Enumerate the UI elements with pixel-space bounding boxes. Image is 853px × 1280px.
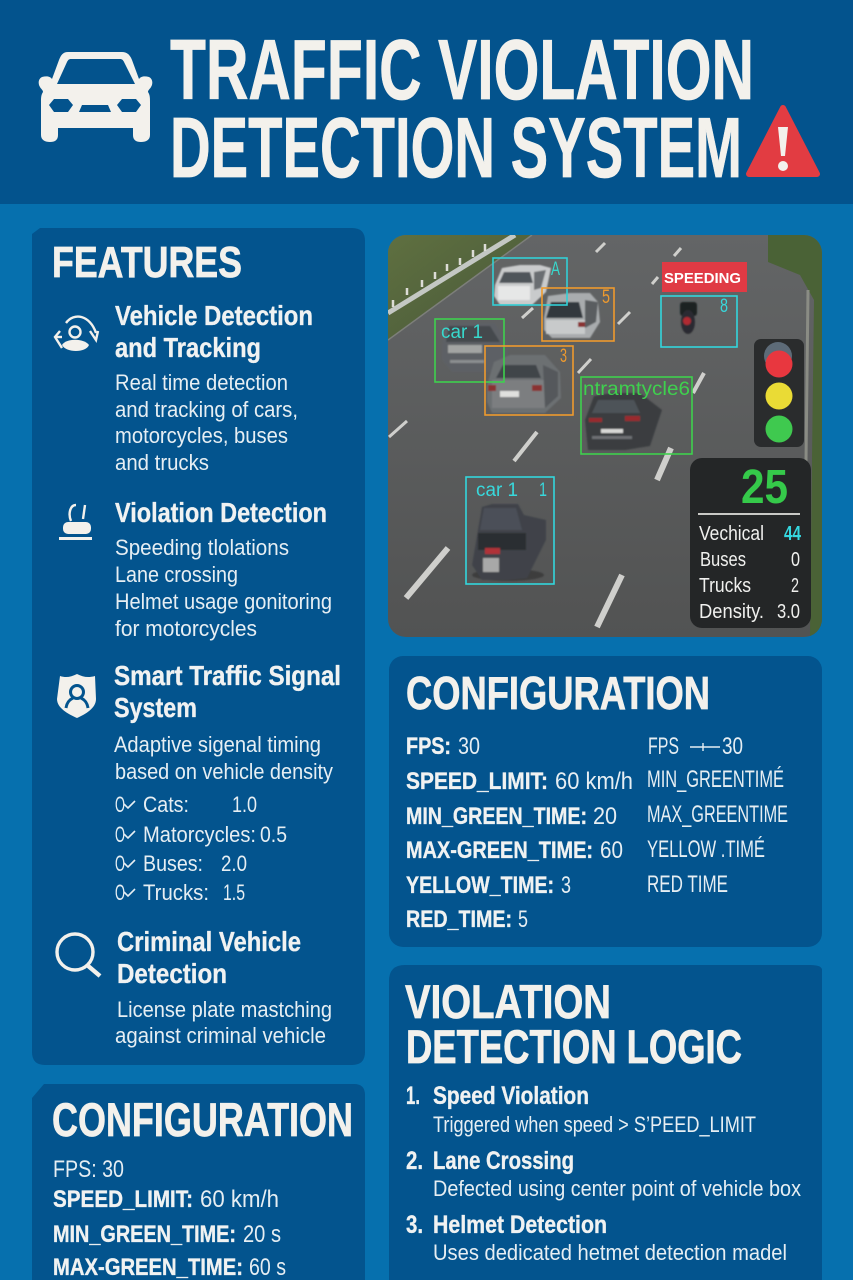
panel: configuration left [32, 1084, 365, 1280]
feature description: for motorcycles [115, 616, 257, 641]
configuration values: MIN_GREEN_TIME: [406, 803, 587, 830]
detection labels: 3 [560, 346, 567, 367]
vehicle weights list: 1.5 [223, 880, 245, 905]
vehicle weights list: O [115, 822, 125, 847]
configuration values: SPEED_LIMIT: [406, 768, 548, 795]
detection labels: ntramtycle6 [583, 379, 690, 400]
stats panel: 0 [791, 549, 800, 571]
vehicles [442, 265, 697, 581]
configuration second column: YELLOW .TIMÉ [647, 836, 765, 863]
detection boxes [435, 258, 737, 584]
configuration list: 60 km/h [200, 1186, 279, 1213]
configuration list: 20 s [243, 1221, 281, 1248]
logic item 2: Defected using center point of vehicle box [433, 1176, 801, 1201]
stats panel: Buses [700, 549, 746, 571]
configuration second column: MAX_GREENTIME [647, 801, 788, 828]
feature description [114, 732, 333, 784]
icon: violation [59, 505, 92, 540]
stats panel: 25 [741, 461, 788, 514]
configuration values: MAX-GREEN_TIME: [406, 837, 593, 864]
icon: warning triangle [749, 108, 817, 174]
photo: traffic detection scene [388, 235, 822, 637]
vehicle weights list: 2.0 [221, 851, 247, 876]
configuration values: 5 [518, 906, 528, 933]
detection labels: 5 [602, 287, 610, 308]
logic item 3: 3. [406, 1211, 423, 1239]
feature: criminal vehicle detection [57, 926, 332, 1048]
panel: features [32, 228, 365, 1065]
feature heading [115, 300, 313, 363]
panel: configuration right [389, 656, 822, 947]
stats panel: 44 [784, 523, 802, 545]
feature heading: Detection [117, 958, 227, 989]
feature description: and trucks [115, 450, 209, 475]
road surface [388, 235, 822, 637]
car: dark front [472, 504, 546, 581]
feature heading [114, 660, 341, 723]
configuration values: 60 km/h [555, 768, 633, 795]
stats panel [690, 458, 811, 628]
logic item 2: 2. [406, 1147, 423, 1175]
feature heading: and Tracking [115, 332, 261, 363]
stats panel: 2 [791, 575, 799, 597]
grass right [768, 235, 822, 637]
vehicle weights list [115, 792, 287, 905]
configuration second column: MIN_GREENTIMÉ [647, 766, 784, 793]
detection labels: A [551, 259, 560, 280]
vehicle weights list: Matorcycles: [143, 822, 256, 847]
feature description: against criminal vehicle [115, 1023, 326, 1048]
configuration values [406, 733, 633, 933]
feature description: based on vehicle density [115, 759, 333, 784]
configuration second column: FPS [648, 733, 679, 760]
car: silver [544, 293, 600, 338]
feature: vehicle detection and tracking [55, 300, 313, 475]
feature description [115, 535, 332, 641]
vehicle weights list: 0.5 [260, 822, 287, 847]
detection labels: 8 [720, 296, 728, 317]
heading: violation detection logic: VIOLATION [405, 975, 611, 1028]
car: gray left [446, 326, 500, 364]
logic item 1 [406, 1082, 756, 1137]
feature description: Speeding tlolations [115, 535, 289, 560]
configuration list: SPEED_LIMIT: [53, 1186, 193, 1213]
stats panel: Density. [699, 601, 764, 623]
car: gray centre [487, 355, 561, 413]
icon: shield [57, 674, 96, 718]
lane markings [389, 243, 704, 627]
configuration list [53, 1156, 286, 1280]
vehicle weights list: O [115, 792, 125, 817]
car: dark [585, 393, 662, 450]
configuration values: FPS: [406, 733, 451, 760]
feature description [115, 370, 298, 475]
logic item 1: Speed Violation [433, 1082, 589, 1110]
vehicle weights list: Buses: [143, 851, 203, 876]
logic item 3 [406, 1211, 787, 1265]
icon: car [39, 52, 152, 142]
detection labels [441, 259, 728, 501]
vehicle weights list: O [115, 880, 125, 905]
feature heading: System [114, 692, 197, 723]
heading: configuration: CONFIGURATION [52, 1093, 353, 1146]
feature description: and tracking of cars, [115, 397, 298, 422]
feature heading: Violation Detection [115, 497, 327, 528]
feature: smart traffic signal system [57, 660, 341, 905]
configuration list: MIN_GREEN_TIME: [53, 1221, 236, 1248]
grass left [388, 235, 532, 340]
icon: magnifier [57, 934, 100, 976]
configuration values: RED_TIME: [406, 906, 512, 933]
feature description: Helmet usage gonitoring [115, 589, 332, 614]
speeding tag [662, 262, 747, 292]
heading: violation detection logic [405, 975, 742, 1073]
configuration values: 3 [561, 872, 571, 899]
detection labels: car 1 [441, 322, 483, 343]
feature description: motorcycles, buses [115, 423, 288, 448]
stats panel: Trucks [699, 575, 751, 597]
speeding tag: SPEEDING [664, 270, 741, 287]
configuration values: YELLOW_TIME: [406, 872, 554, 899]
motorcycle [680, 302, 697, 334]
feature heading: Vehicle Detection [115, 300, 313, 331]
detection labels: 1 [539, 480, 547, 501]
feature description: License plate mastching [117, 997, 332, 1022]
feature heading: Smart Traffic Signal [114, 660, 341, 691]
logic item 1: Triggered when speed > S’PEED_LIMIT [433, 1112, 756, 1137]
feature: violation detection [59, 497, 332, 641]
car: white [494, 265, 551, 305]
configuration second column: 30 [722, 733, 743, 760]
vehicle weights list: Cats: [143, 792, 189, 817]
guard rail [388, 235, 532, 340]
feature description: Real time detection [115, 370, 288, 395]
heading: features: FEATURES [52, 238, 242, 287]
header banner [0, 0, 853, 204]
panel: violation detection logic [389, 965, 822, 1280]
feature description [115, 997, 332, 1048]
vehicle weights list: 1.0 [232, 792, 257, 817]
configuration values: 20 [593, 803, 617, 830]
configuration second column: RED TIME [647, 871, 728, 898]
stats panel: Vechical [699, 523, 764, 545]
vehicle weights list: Trucks: [143, 880, 209, 905]
logic item 2 [406, 1147, 801, 1201]
logic item 2: Lane Crossing [433, 1147, 574, 1175]
configuration values: 60 [600, 837, 623, 864]
configuration second column [647, 733, 788, 898]
heading: configuration: CONFIGURATION [406, 667, 710, 719]
feature description: Adaptive sigenal timing [114, 732, 321, 757]
logic item 1: 1. [406, 1082, 420, 1110]
title [170, 23, 754, 196]
detection labels: car 1 [476, 480, 518, 501]
feature heading [117, 926, 301, 989]
configuration list: FPS: 30 [53, 1156, 124, 1183]
logic item 3: Helmet Detection [433, 1211, 607, 1239]
feature description: Lane crossing [115, 562, 238, 587]
logic item 3: Uses dedicated hetmet detection madel [433, 1240, 787, 1265]
icon: tracking [55, 317, 98, 351]
feature heading: Criminal Vehicle [117, 926, 301, 957]
configuration values: 30 [458, 733, 480, 760]
vehicle weights list: O [115, 851, 125, 876]
stats panel: 3.0 [777, 601, 800, 623]
heading: violation detection logic: DETECTION LOGIC [406, 1020, 742, 1073]
traffic light [754, 339, 804, 447]
